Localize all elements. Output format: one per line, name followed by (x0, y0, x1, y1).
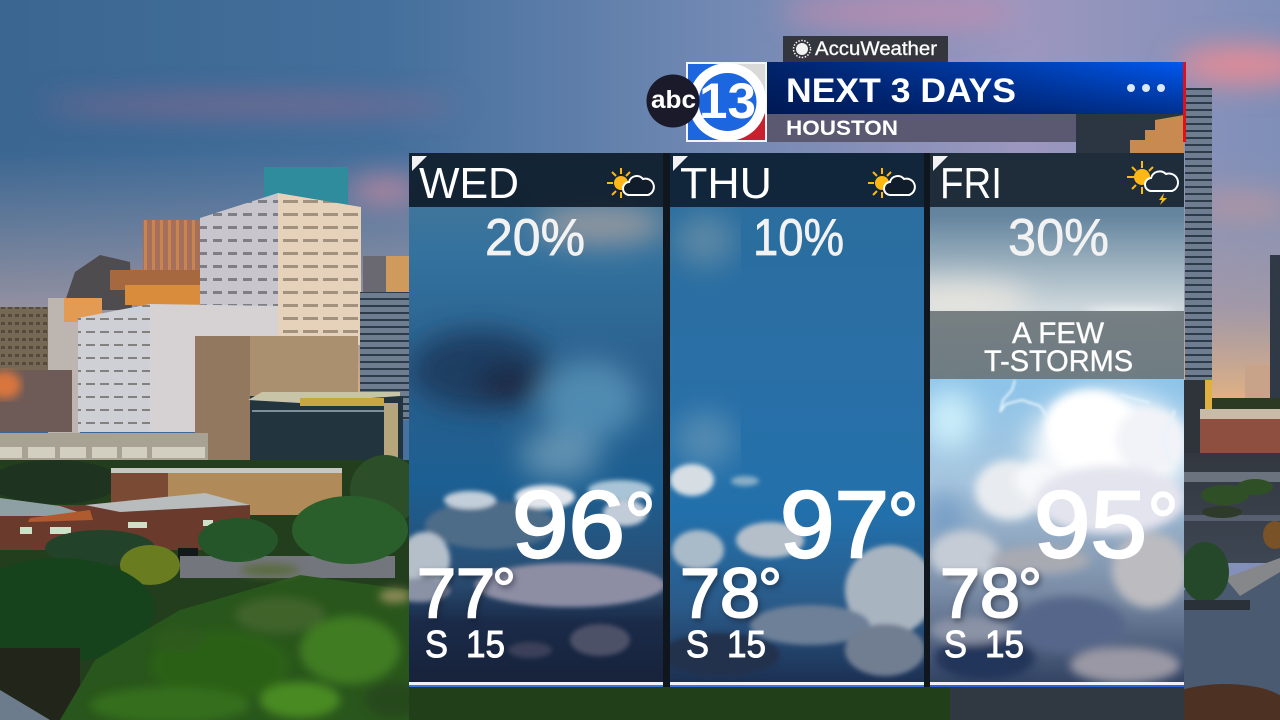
AccuWeather tag: AccuWeather (815, 39, 938, 60)
low temperature (682, 567, 784, 624)
gaps between panels (663, 153, 670, 687)
title: NEXT 3 DAYS (786, 72, 1016, 110)
sky texture: Wednesday clouds (390, 205, 665, 658)
day header: THU: THU (680, 159, 772, 208)
high temperature: ° (1147, 475, 1179, 569)
bottom rule (930, 682, 1184, 687)
high temperature (1038, 490, 1175, 560)
panel: Friday forecast (930, 153, 1184, 687)
location bar (767, 114, 1076, 142)
low temperature: ° (1018, 557, 1042, 622)
bottom rule (409, 682, 663, 687)
high temperature (783, 490, 915, 560)
day header: FRI (930, 153, 1184, 208)
right tower and city (1076, 114, 1184, 162)
panel: Thursday forecast (660, 153, 935, 687)
wind: 15 (985, 624, 1024, 666)
menu dots (1127, 84, 1165, 92)
high temperature: ° (624, 475, 656, 569)
wind: 15 (727, 624, 766, 666)
low temperature: 77 (417, 554, 495, 632)
wind (426, 630, 504, 658)
high temperature: 97 (780, 472, 889, 578)
low temperature (942, 566, 1044, 624)
strip below panels (409, 687, 969, 720)
wind: S (686, 624, 709, 666)
logo: abc13: 13 (699, 73, 756, 129)
icon: sun, cloud and lightning (1127, 161, 1178, 205)
sky texture: Friday clouds (930, 265, 1184, 682)
day header: WED: WED (419, 159, 519, 208)
low temperature: ° (492, 557, 516, 622)
logo: abc13 (646, 62, 767, 142)
high temperature: 96 (512, 472, 625, 578)
precipitation chance: 20% (485, 209, 585, 267)
logo: abc13: abc (651, 86, 696, 114)
precipitation chance: 10% (753, 209, 844, 267)
condition label (930, 311, 1184, 379)
wind: 15 (466, 624, 505, 666)
low temperature: 78 (940, 554, 1020, 632)
AccuWeather tag (783, 36, 948, 62)
title banner (767, 62, 1186, 142)
left foreground: trees, low buildings (0, 460, 409, 720)
condition label: A FEW (1012, 317, 1105, 350)
wind: S (944, 624, 967, 666)
condition label: T-STORMS (984, 345, 1133, 378)
location bar: HOUSTON (786, 117, 898, 140)
day header: FRI: FRI (940, 159, 1002, 208)
high temperature: 95 (1034, 472, 1147, 578)
left city (264, 167, 348, 205)
panel: Wednesday forecast (390, 153, 665, 687)
day header: THU (670, 153, 924, 208)
sky texture: Thursday clouds (660, 214, 935, 677)
wind: S (425, 624, 448, 666)
wind (945, 630, 1023, 658)
low temperature: ° (758, 557, 782, 622)
day header: WED (409, 153, 663, 208)
high temperature: ° (887, 475, 919, 569)
icon: sun behind cloud (868, 168, 915, 198)
wind (687, 630, 765, 658)
low temperature (418, 567, 518, 621)
low temperature: 78 (680, 554, 760, 632)
icon: sun behind cloud (607, 168, 654, 198)
bottom rule (670, 682, 924, 687)
precipitation chance: 30% (1008, 209, 1109, 267)
high temperature (515, 490, 652, 560)
